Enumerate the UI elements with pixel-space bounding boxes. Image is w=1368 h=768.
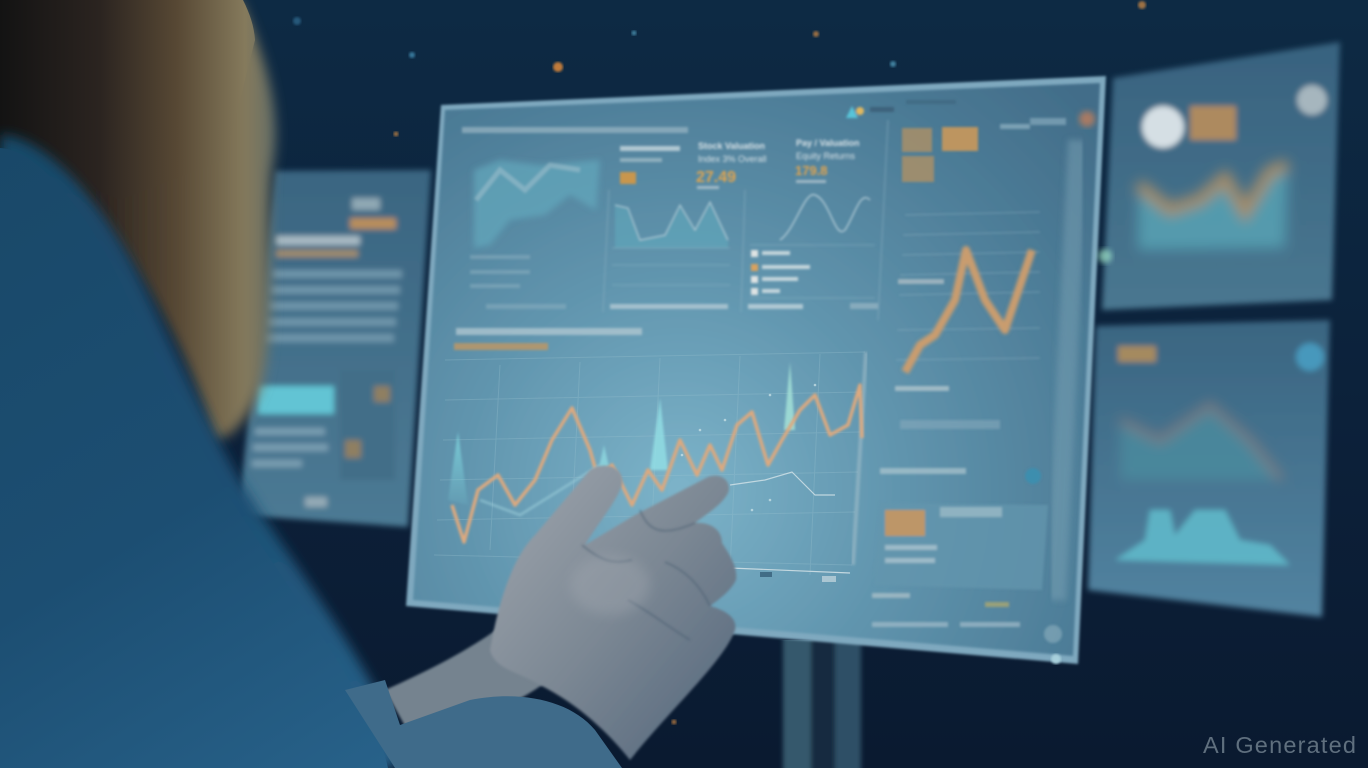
metric: 27.49: 27.49 — [696, 169, 736, 186]
orange label — [1118, 346, 1156, 362]
knuckle highlight — [570, 555, 650, 615]
area chart — [1138, 165, 1288, 250]
icon: small white circle — [1297, 85, 1327, 115]
glowing star particles — [293, 1, 1146, 724]
icon: white circle — [1142, 106, 1184, 148]
chart grid — [434, 352, 865, 575]
person: blurred shoulder and hair — [0, 0, 398, 768]
watermark: AI Generated — [1203, 732, 1357, 758]
right sidebar of main monitor — [872, 124, 1078, 643]
main chart heading — [454, 328, 642, 350]
legend list — [751, 250, 758, 257]
small area chart — [474, 160, 600, 248]
bottom corner dot — [1051, 654, 1061, 664]
top dashboard section — [462, 120, 888, 320]
logo and status at top — [846, 100, 1095, 127]
panel: upper right screen — [1102, 42, 1340, 310]
forearm and hand — [345, 466, 736, 768]
top dashboard section: Equity Returns — [796, 151, 856, 161]
orange data line — [452, 385, 862, 542]
pale secondary line — [480, 465, 600, 515]
heading lines — [276, 236, 360, 245]
panel: main monitor — [406, 76, 1112, 664]
vertical dividers — [603, 120, 888, 320]
panel: left screen — [238, 170, 431, 527]
forearm — [385, 620, 560, 735]
blurred line chart — [1120, 405, 1282, 480]
sidebar scroll rail — [1056, 140, 1078, 600]
icon: blue dot — [1296, 343, 1324, 371]
sidebar rows — [896, 212, 1040, 360]
cyan spikes — [448, 432, 468, 505]
orange sidebar chart — [905, 250, 1032, 372]
coat — [0, 135, 398, 768]
table — [264, 270, 402, 342]
orange label block — [1190, 106, 1236, 140]
axis — [730, 568, 850, 573]
small line chart one — [615, 202, 728, 248]
finger creases — [582, 510, 710, 640]
sidebar card — [874, 503, 1048, 590]
scatter dots — [681, 384, 816, 511]
text rows — [252, 428, 328, 467]
metric: 179.8: 179.8 — [795, 163, 828, 178]
glow at monitor edge — [1098, 249, 1112, 263]
orange tag — [350, 218, 396, 229]
column two text: Stock Valuation — [698, 141, 765, 151]
monitor stand — [783, 640, 861, 768]
cyan bar chart — [1115, 510, 1290, 565]
hair — [0, 0, 276, 439]
cuff sleeve — [345, 680, 622, 768]
column three text: Pay / Valuation — [796, 138, 860, 148]
top dashboard section: Index 3% Overall — [698, 154, 767, 164]
section heading — [462, 127, 688, 133]
small line chart two — [780, 195, 870, 240]
cyan highlight bar — [258, 386, 334, 414]
main line chart — [434, 352, 866, 582]
hand back and palm — [490, 466, 736, 760]
panel: lower right screen — [1088, 320, 1330, 617]
column one text — [620, 146, 680, 151]
